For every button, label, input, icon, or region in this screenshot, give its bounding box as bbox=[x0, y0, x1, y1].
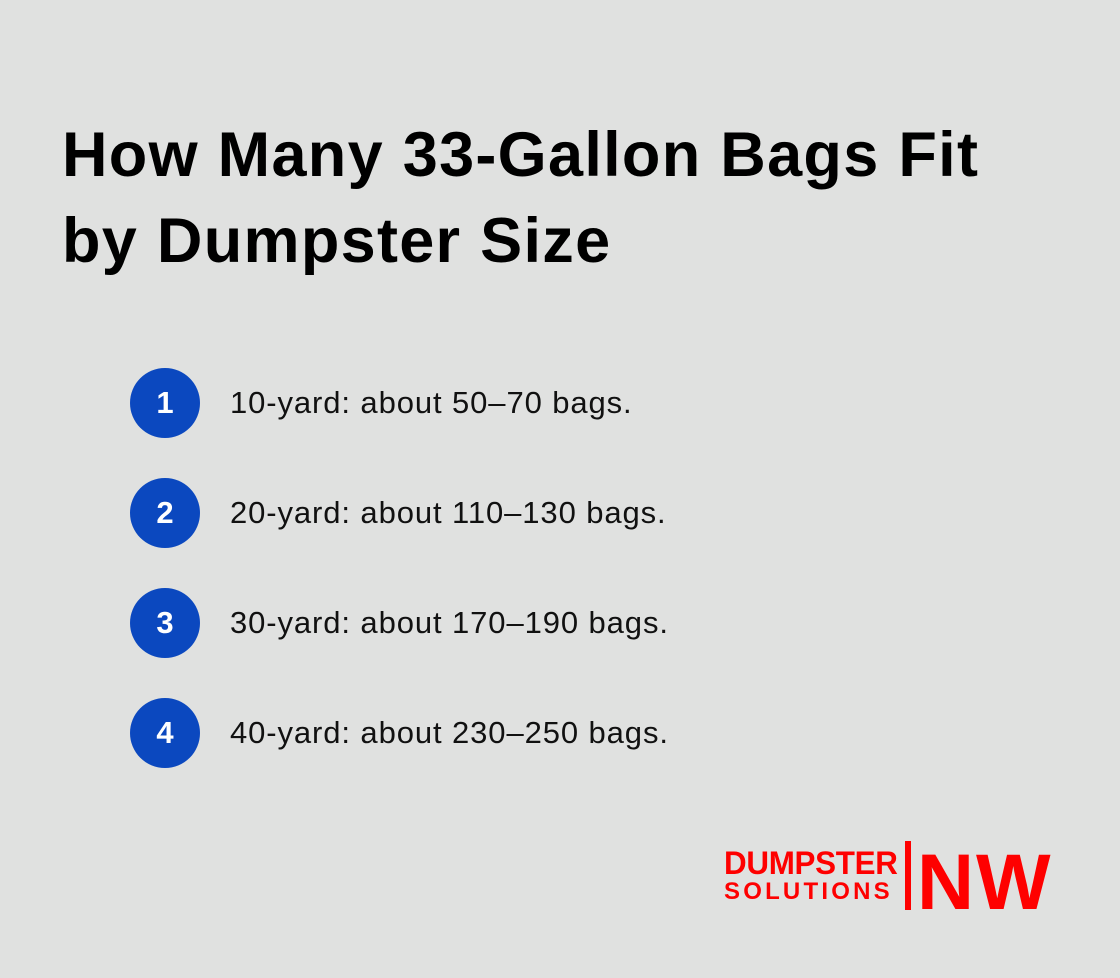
list item 3: 30-yard: about 170–190 bags. bbox=[230, 605, 669, 640]
list item 2 bbox=[130, 478, 667, 548]
logo bbox=[724, 837, 1053, 926]
list item 3 bbox=[130, 588, 669, 658]
list item 1 bbox=[130, 368, 633, 438]
title bbox=[62, 120, 979, 276]
number badge 4 bbox=[130, 698, 200, 768]
logo: NW bbox=[917, 837, 1053, 926]
logo: SOLUTIONS bbox=[724, 878, 893, 905]
title: How Many 33-Gallon Bags Fit bbox=[62, 120, 979, 190]
list item 4: 40-yard: about 230–250 bags. bbox=[230, 715, 669, 750]
list item 2: 20-yard: about 110–130 bags. bbox=[230, 495, 667, 530]
list item 1: 10-yard: about 50–70 bags. bbox=[230, 385, 633, 420]
title: by Dumpster Size bbox=[62, 206, 611, 276]
number badge 3 bbox=[130, 588, 200, 658]
number badge 1 bbox=[130, 368, 200, 438]
number badge 2: 2 bbox=[156, 495, 174, 530]
number badge 4: 4 bbox=[156, 715, 174, 750]
logo: DUMPSTER bbox=[724, 845, 898, 881]
number badge 2 bbox=[130, 478, 200, 548]
number badge 1: 1 bbox=[156, 385, 174, 420]
number badge 3: 3 bbox=[156, 605, 174, 640]
list item 4 bbox=[130, 698, 669, 768]
